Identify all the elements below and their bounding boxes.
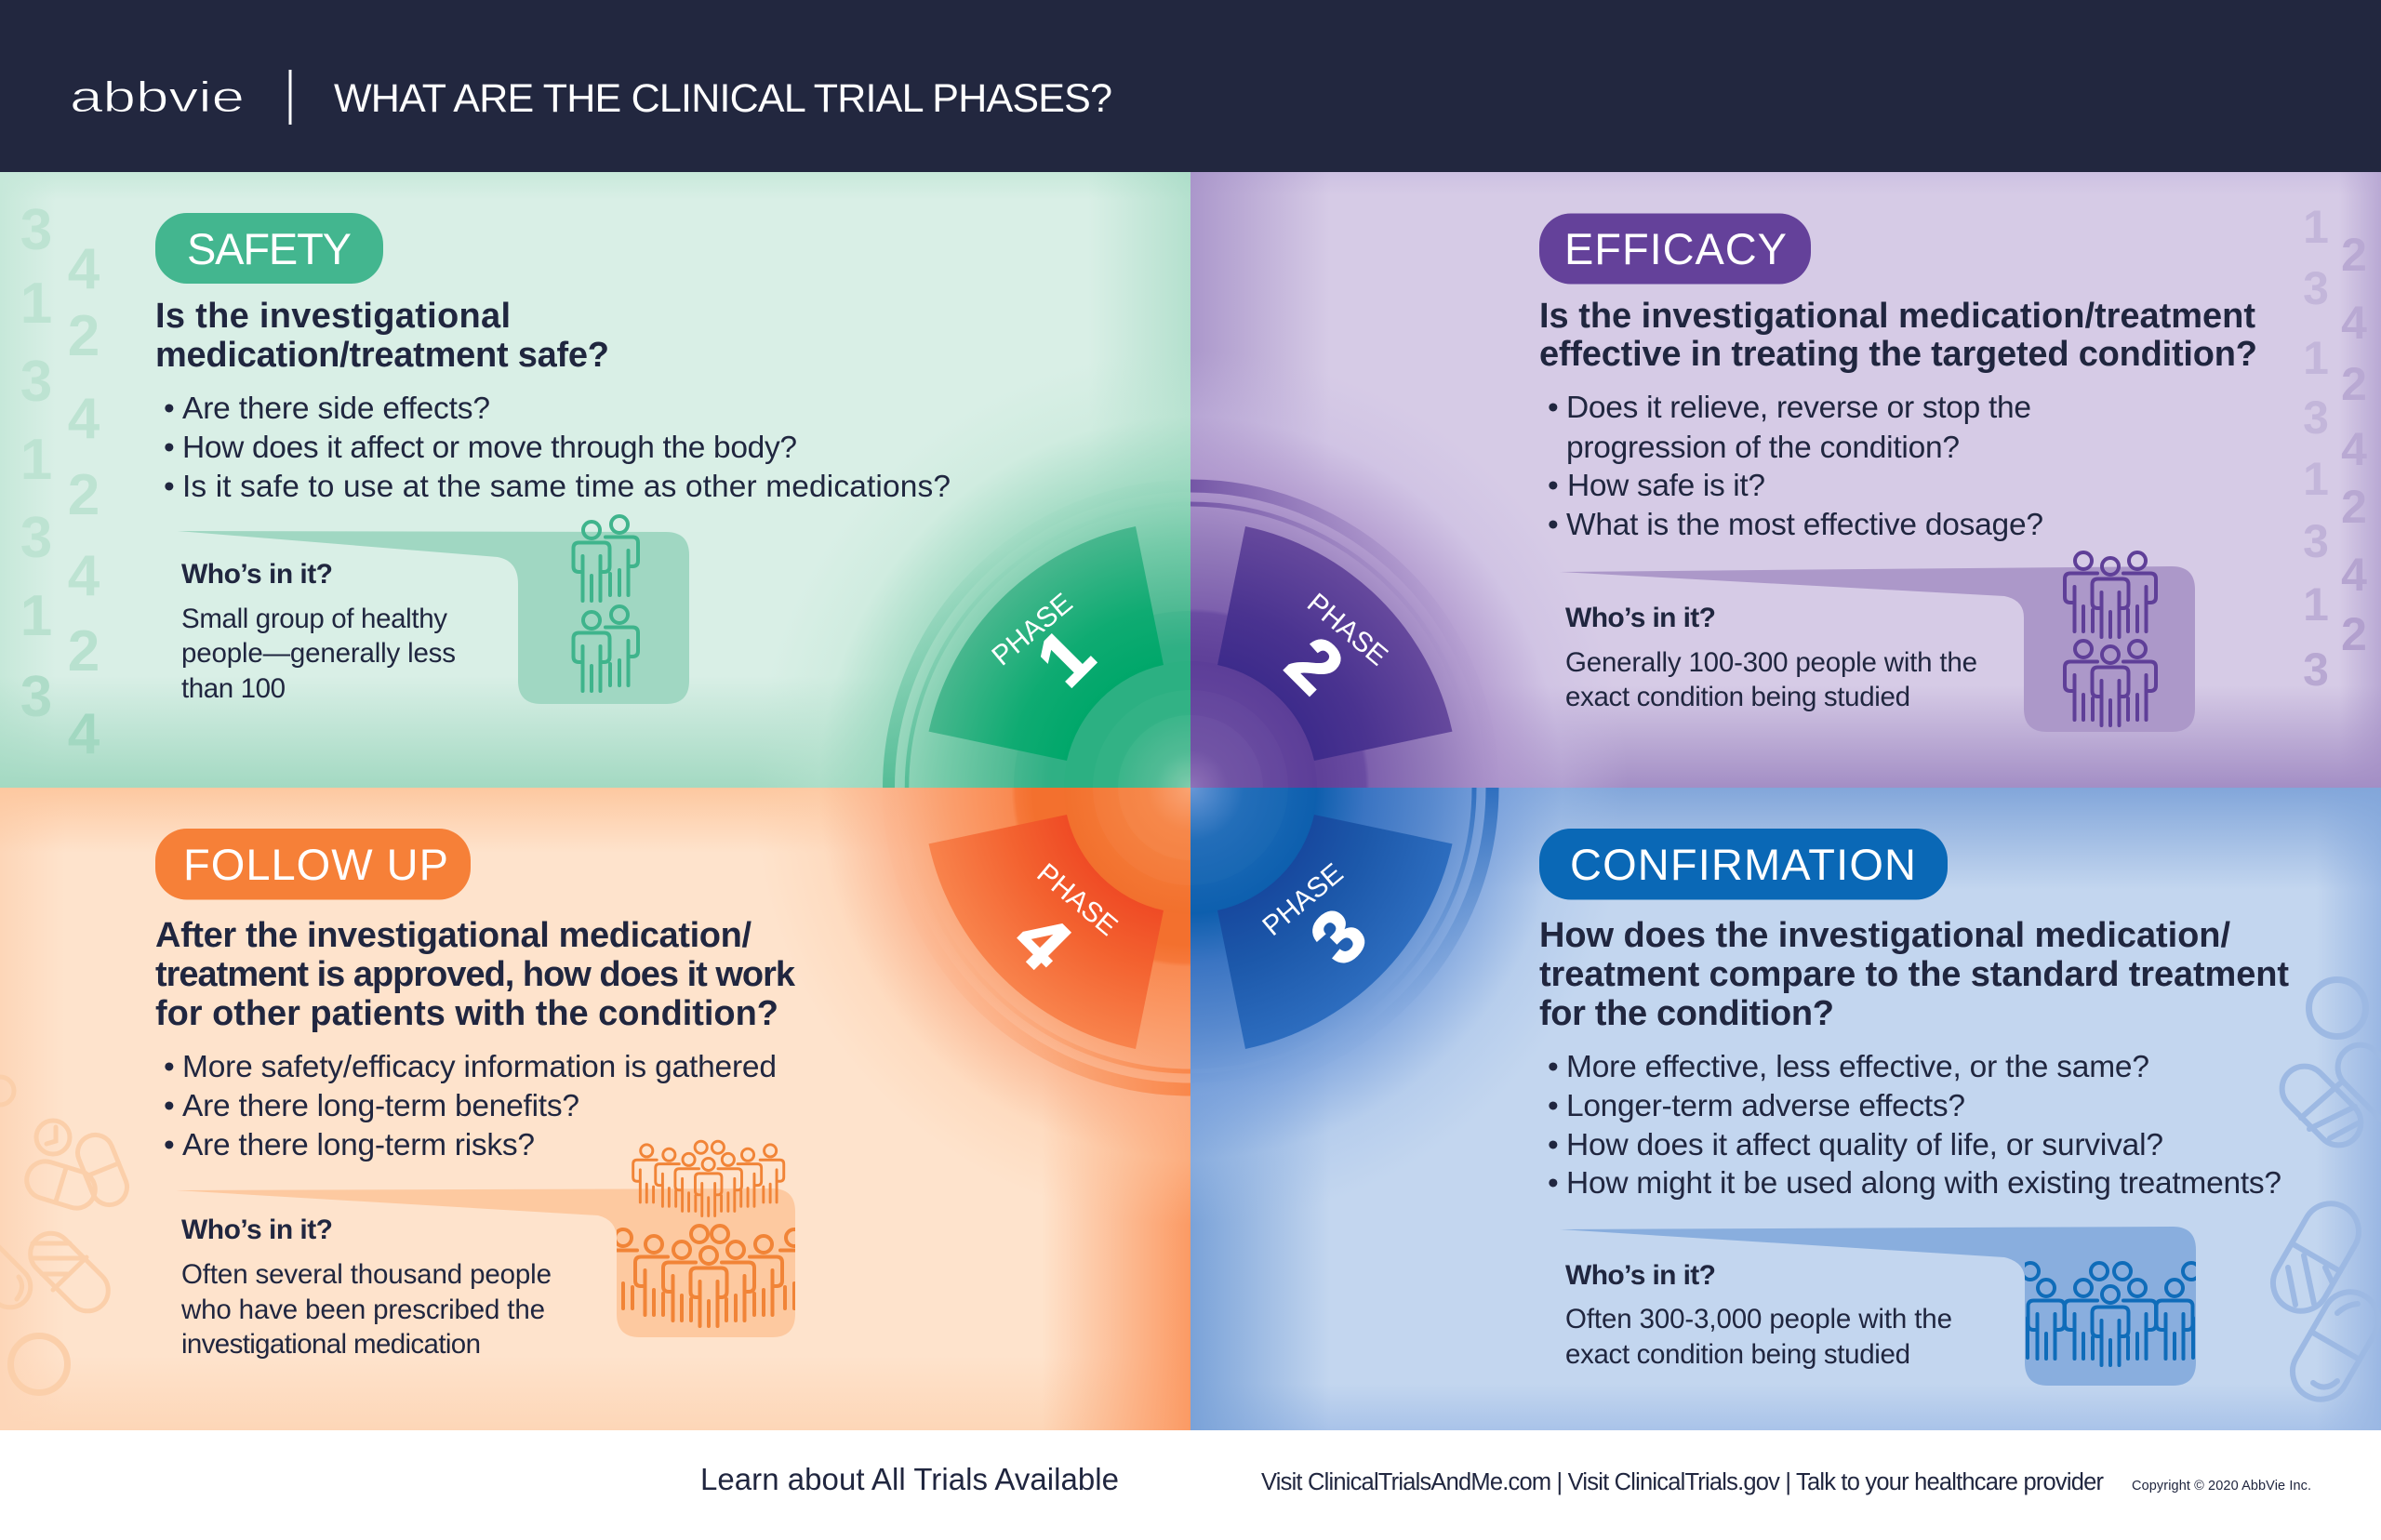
background digits [20, 198, 100, 766]
callout shape [1560, 1227, 2196, 1386]
who's in it text: who have been prescribed the [180, 1294, 545, 1325]
who's in it text: exact condition being studied [1565, 1339, 1910, 1370]
background digits: 3 [2303, 644, 2329, 696]
phase 1 sector: PHASE [986, 588, 1079, 671]
wheel rings [889, 485, 1492, 1090]
callout shape [1560, 566, 2195, 732]
bullet list: Are there long-term risks? [182, 1128, 535, 1162]
bullet list: progression of the condition? [1566, 431, 1960, 465]
phase 2 sector: 2 [1271, 621, 1359, 709]
heading [155, 916, 796, 1033]
copyright: Copyright © 2020 AbbVie Inc. [2132, 1479, 2311, 1494]
wheel rings [889, 485, 1492, 1090]
heading: treatment is approved, how does it work [155, 955, 796, 994]
who's in it text: Generally 100-300 people with the [1565, 647, 1977, 678]
panel: footer [0, 1430, 2381, 1540]
background digits [2303, 201, 2367, 696]
background digits: 4 [68, 702, 100, 766]
bullet list: • [1548, 469, 1559, 503]
phase 1 sector [928, 526, 1164, 761]
phase 3 sector: 3 [1295, 893, 1382, 980]
bullet list: More effective, less effective, or the same? [1566, 1050, 2149, 1084]
bullet list: • [164, 470, 175, 504]
bullet list: • [164, 1050, 175, 1084]
who's in it text: Who’s in it? [1565, 1260, 1716, 1291]
phase 4 sector: PHASE [1031, 857, 1124, 942]
pill: safety [155, 213, 383, 284]
who's in it text: Small group of healthy [181, 604, 447, 634]
who's in it text [181, 559, 456, 704]
background digits: 3 [20, 198, 52, 262]
background pill icons [2263, 980, 2381, 1410]
pill: efficacy [1539, 214, 1811, 285]
phase 4 sector [928, 815, 1164, 1049]
pill: follow up: FOLLOW UP [183, 840, 448, 889]
bullet list: Are there side effects? [182, 392, 490, 426]
who's in it text [1565, 1260, 1952, 1370]
background digits: 2 [68, 463, 100, 527]
who's in it text: Who’s in it? [181, 559, 333, 590]
icon: people group [2065, 552, 2156, 725]
heading [155, 297, 609, 375]
panel: safety (phase 1) [0, 172, 1190, 788]
bullet list: • [164, 431, 175, 465]
bullet list: How does it affect or move through the body? [182, 431, 797, 465]
background digits: 3 [2303, 262, 2329, 314]
callout shape [176, 1188, 795, 1337]
icon: people group [573, 516, 638, 691]
who's in it text: Who’s in it? [1565, 603, 1716, 633]
background digits: 1 [20, 428, 52, 492]
background digits: 2 [2341, 481, 2367, 533]
heading: Is the investigational [155, 297, 511, 336]
title: WHAT ARE THE CLINICAL TRIAL PHASES? [334, 76, 1112, 121]
bullet list: • [1548, 1050, 1559, 1084]
pill: safety: SAFETY [187, 224, 352, 273]
background digits: 3 [2303, 515, 2329, 567]
footer call to action: Learn about All Trials Available [700, 1462, 1119, 1496]
heading: After the investigational medication/ [155, 916, 752, 955]
bullet list [1548, 391, 2043, 542]
background digits: 2 [68, 619, 100, 684]
background digits: 1 [2303, 453, 2329, 505]
heading [1539, 297, 2257, 374]
wheel hub [1064, 661, 1317, 914]
bullet list: • [1548, 1089, 1559, 1123]
heading: treatment compare to the standard treatment [1539, 955, 2289, 994]
bullet list: • [164, 1089, 175, 1123]
bullet list: Is it safe to use at the same time as other medications? [182, 470, 951, 504]
background digits: 1 [2303, 332, 2329, 384]
background digits: 4 [2341, 297, 2367, 349]
background digits: 1 [20, 272, 52, 336]
who's in it text [180, 1215, 552, 1360]
footer links: Visit ClinicalTrialsAndMe.com | Visit ClinicalTrials.gov | Talk to your healthcare provider [1261, 1469, 2104, 1495]
who's in it text: exact condition being studied [1565, 682, 1910, 712]
phase 4 sector: 4 [999, 897, 1086, 986]
background digits: 3 [20, 665, 52, 729]
background digits: 4 [2341, 549, 2367, 601]
wheel hub [1064, 661, 1317, 914]
pill: confirmation: CONFIRMATION [1570, 840, 1916, 889]
phase 3 sector [1217, 815, 1453, 1049]
bullet list: Are there long-term benefits? [182, 1089, 579, 1123]
heading: for the condition? [1539, 994, 1834, 1033]
wheel hub [1064, 661, 1317, 914]
who's in it text: investigational medication [181, 1329, 481, 1360]
pill: confirmation [1539, 829, 1948, 900]
phase 2 sector: PHASE [1301, 588, 1393, 671]
heading: How does the investigational medication/ [1539, 916, 2230, 955]
background digits: 1 [20, 584, 52, 648]
heading: effective in treating the targeted condition? [1539, 335, 2257, 374]
panel: efficacy (phase 2) [1190, 172, 2381, 788]
bullet list: How might it be used along with existing treatments? [1566, 1166, 2281, 1201]
icon: crowd of people [2022, 1263, 2200, 1365]
bullet list: Longer-term adverse effects? [1566, 1089, 1965, 1123]
phase 1 sector: 1 [1021, 614, 1109, 701]
panel: header bar [0, 0, 2381, 172]
bullet list: How does it affect quality of life, or survival? [1566, 1128, 2163, 1162]
bullet list: More safety/efficacy information is gathered [182, 1050, 777, 1084]
phase 2 sector [1217, 526, 1453, 761]
background digits: 4 [68, 387, 100, 451]
bullet list: Does it relieve, reverse or stop the [1566, 391, 2031, 425]
who's in it text: people—generally less [181, 638, 456, 669]
who's in it text: Who’s in it? [181, 1215, 333, 1245]
background digits: 3 [2303, 392, 2329, 444]
pill: efficacy: EFFICACY [1564, 224, 1787, 273]
background digits: 2 [2341, 229, 2367, 281]
background digits: 4 [68, 544, 100, 608]
callout shape [178, 531, 689, 704]
bullet list: • [1548, 508, 1559, 542]
bullet list [164, 1050, 777, 1162]
background digits: 2 [2341, 358, 2367, 410]
background digits: 1 [2303, 201, 2329, 253]
pill: follow up [155, 829, 471, 900]
background digits: 1 [2303, 578, 2329, 631]
wheel hub [1064, 661, 1317, 914]
bullet list: • [1548, 1166, 1559, 1201]
background digits: 3 [20, 506, 52, 570]
heading: medication/treatment safe? [155, 336, 609, 375]
background pill icons [0, 1077, 132, 1393]
bullet list: • [1548, 391, 1559, 425]
icon: crowd of people [617, 1140, 795, 1328]
bullet list: • [164, 1128, 175, 1162]
bullet list [1548, 1050, 2281, 1201]
background digits: 2 [2341, 608, 2367, 660]
who's in it text: than 100 [181, 673, 286, 704]
heading: for other patients with the condition? [155, 994, 778, 1033]
bullet list: • [164, 392, 175, 426]
panel: confirmation (phase 3) [1190, 788, 2381, 1430]
logo: abbvie wordmark: abbvie [70, 73, 245, 121]
bullet list [164, 392, 951, 504]
wheel rings [889, 485, 1492, 1090]
background digits: 4 [2341, 423, 2367, 475]
background digits: 4 [68, 237, 100, 301]
bullet list: • [1548, 1128, 1559, 1162]
who's in it text [1565, 603, 1977, 712]
bullet list: How safe is it? [1567, 469, 1765, 503]
background digits: 3 [20, 350, 52, 414]
heading [1539, 916, 2289, 1033]
who's in it text: Often 300-3,000 people with the [1565, 1304, 1952, 1334]
background digits: 2 [68, 304, 100, 368]
phase 3 sector: PHASE [1257, 857, 1350, 942]
who's in it text: Often several thousand people [181, 1259, 552, 1290]
bullet list: What is the most effective dosage? [1566, 508, 2043, 542]
panel: follow up (phase 4) [0, 788, 1190, 1430]
wheel rings [889, 485, 1492, 1090]
heading: Is the investigational medication/treatment [1539, 297, 2255, 336]
